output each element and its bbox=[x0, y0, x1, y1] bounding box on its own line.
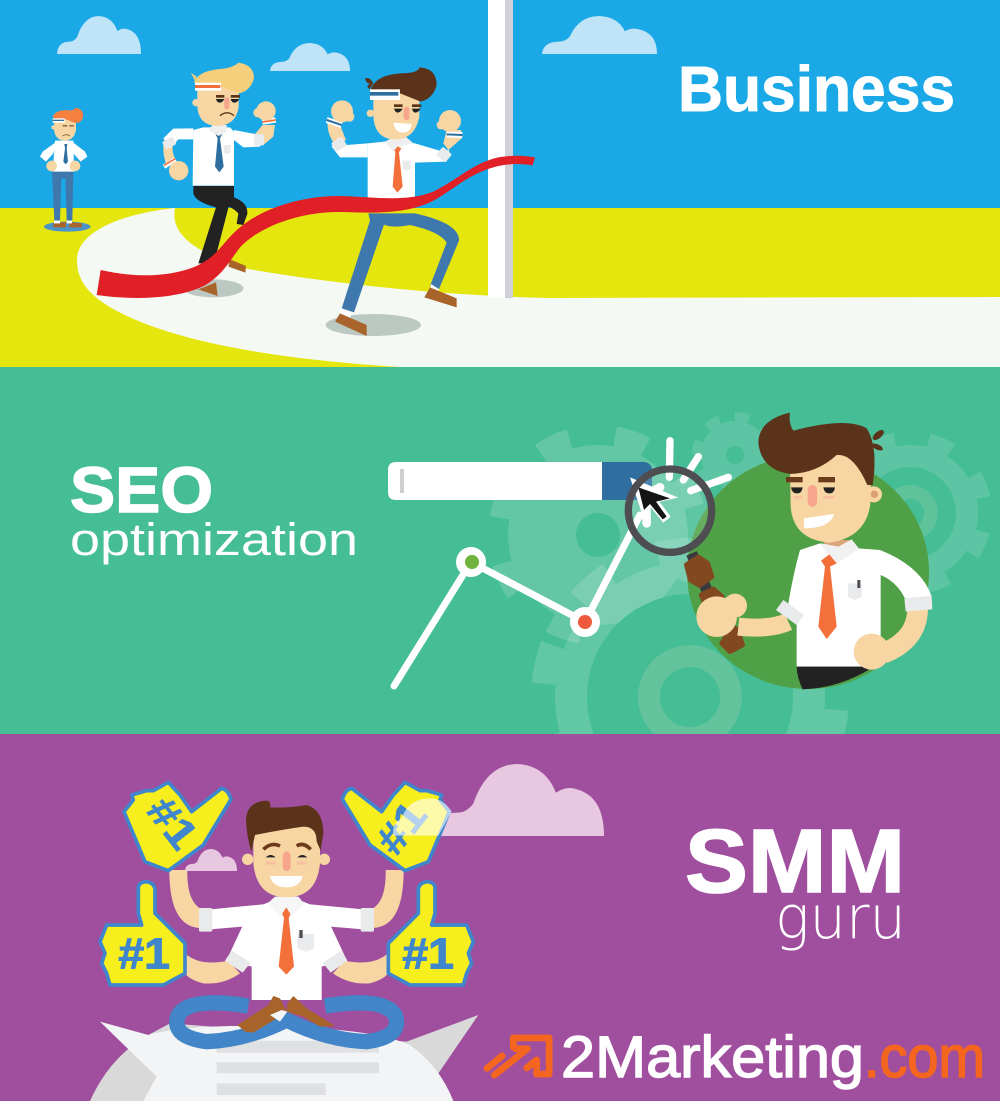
yellow ground bbox=[0, 208, 1000, 367]
foam thumb right: #1 bbox=[402, 930, 454, 978]
gear top center bbox=[483, 420, 713, 650]
brown-haired winner bbox=[326, 67, 462, 336]
search bar bbox=[388, 462, 652, 500]
heading: SEO: SEO bbox=[70, 454, 213, 526]
panel: SMM guru bbox=[0, 734, 1000, 1101]
blond runner bbox=[162, 63, 276, 297]
crossed legs bbox=[177, 1003, 397, 1042]
heading: Business: Business bbox=[678, 53, 955, 125]
tie bbox=[279, 907, 294, 975]
collar bbox=[268, 897, 304, 916]
head bbox=[242, 801, 330, 897]
pocket bbox=[848, 580, 862, 600]
logo wordmark: 2Marketing bbox=[561, 1025, 864, 1090]
upper arms bbox=[169, 870, 404, 932]
click rays bbox=[669, 441, 728, 491]
runners and ribbon bbox=[40, 63, 535, 336]
green chart point bbox=[456, 547, 486, 577]
green background bbox=[0, 367, 1000, 734]
magnifying glass bbox=[628, 469, 743, 652]
cloud middle bbox=[270, 43, 350, 71]
gear small top bbox=[697, 417, 773, 493]
sky background bbox=[0, 0, 1000, 208]
foam finger top right bbox=[342, 782, 449, 871]
dome and paper bbox=[90, 1015, 478, 1101]
large pink cloud bbox=[432, 764, 604, 836]
white running track bbox=[77, 208, 1000, 367]
foam thumb left bbox=[100, 882, 185, 985]
left forearm and hand bbox=[696, 594, 804, 637]
tie bbox=[818, 554, 837, 639]
background gears bbox=[483, 417, 1000, 856]
cloud right bbox=[542, 16, 657, 54]
foam finger top left bbox=[124, 782, 231, 871]
translucent cloud over finger bbox=[393, 798, 452, 836]
purple background bbox=[0, 734, 1000, 1101]
right forearm and hand bbox=[854, 596, 932, 670]
small pink cloud bbox=[185, 849, 237, 871]
foam finger top right: #1 bbox=[366, 792, 436, 863]
red chart point bbox=[570, 607, 600, 637]
green circle behind man bbox=[687, 455, 929, 689]
panel: SEO optimization bbox=[0, 367, 1000, 856]
cloud left bbox=[57, 16, 141, 54]
foam thumb right bbox=[388, 882, 473, 985]
shirt bbox=[788, 543, 932, 667]
shirt bbox=[227, 902, 347, 1000]
subheading: guru: guru bbox=[775, 883, 906, 953]
pocket bbox=[297, 930, 314, 952]
head bbox=[758, 413, 886, 543]
gear bottom bbox=[531, 538, 849, 856]
cursor bbox=[630, 477, 678, 523]
finish pole bbox=[488, 0, 513, 298]
line chart bbox=[394, 515, 640, 686]
collar bbox=[820, 539, 859, 563]
foam finger top left: #1 bbox=[138, 787, 208, 858]
neck bbox=[822, 540, 850, 547]
logo domain: .com bbox=[864, 1025, 985, 1090]
foam thumb left: #1 bbox=[118, 930, 170, 978]
subheading: optimization: optimization bbox=[70, 514, 358, 565]
gear right bbox=[819, 422, 1000, 604]
lower arms bbox=[185, 953, 388, 984]
trousers bbox=[797, 667, 874, 689]
heading: SMM: SMM bbox=[685, 812, 905, 912]
small orange-haired man bbox=[40, 108, 91, 232]
panel: business bbox=[0, 0, 1000, 367]
shirt cuffs bbox=[225, 951, 347, 973]
gear holes bbox=[576, 446, 956, 800]
logo: 2Marketing.com bbox=[487, 1025, 985, 1090]
logo icon bbox=[487, 1038, 549, 1075]
shoes bbox=[237, 996, 335, 1033]
red finish ribbon bbox=[97, 156, 535, 298]
meditating man with foam fingers bbox=[90, 782, 478, 1101]
man with magnifier bbox=[628, 413, 932, 689]
